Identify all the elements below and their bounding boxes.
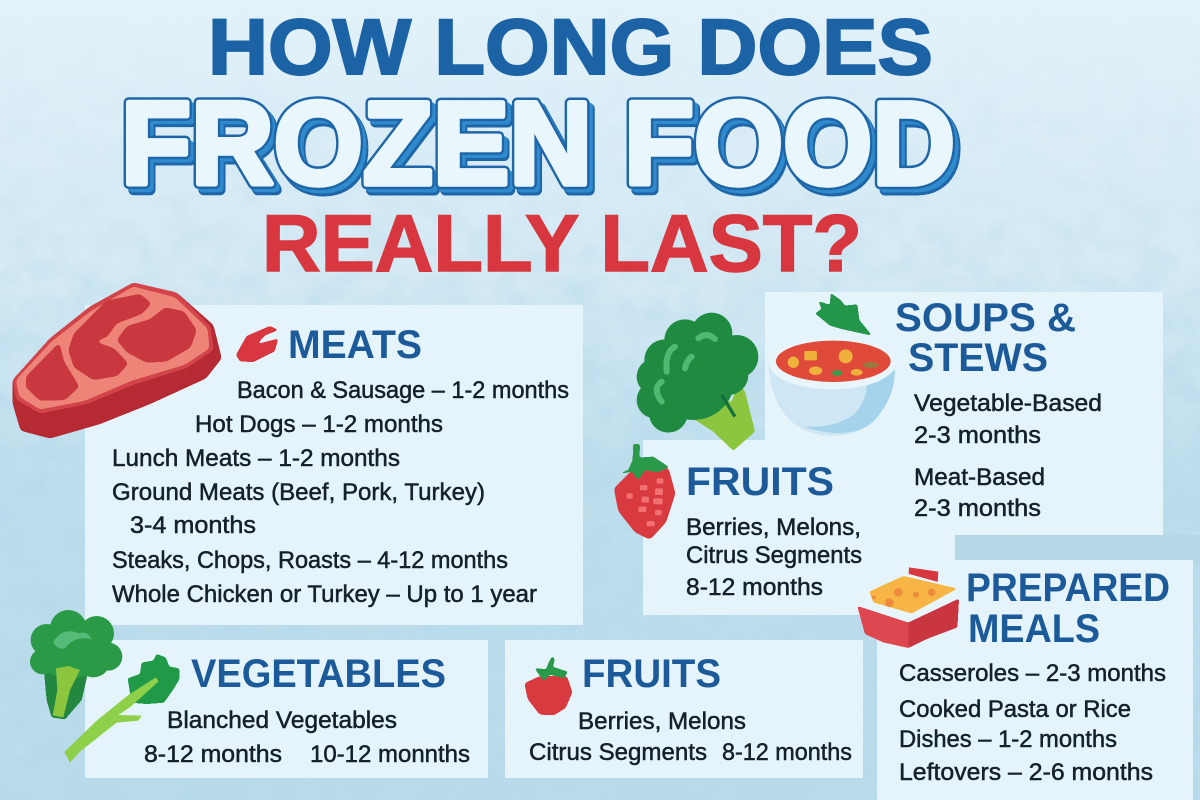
- prepared meals list: Leftovers – 2-6 months: [899, 759, 1153, 786]
- icon: strawberry upper: [613, 444, 675, 540]
- icon: small meat cut: [236, 326, 278, 362]
- panel: band behind prepared meals: [953, 535, 1200, 565]
- panel: soups and stews: [765, 292, 1163, 535]
- fruits lower list: Citrus Segments: [529, 739, 707, 766]
- prepared meals list: [899, 660, 1166, 786]
- fruits upper list: [686, 514, 862, 601]
- panel: vegetables: [85, 640, 488, 778]
- title line: frozen food: FROZEN FOOD: [126, 84, 960, 216]
- heading: soups and stews: SOUPS &: [895, 296, 1076, 340]
- icon: casserole dish: [857, 567, 959, 648]
- panel: meats: [85, 305, 583, 625]
- heading: prepared meals: PREPARED: [966, 566, 1170, 610]
- fruits lower list: 8-12 months: [722, 739, 852, 766]
- soups list: [914, 390, 1102, 522]
- icon: broccoli large: [637, 313, 758, 451]
- soups list: Meat-Based: [914, 464, 1045, 491]
- icon: soup bowl: [768, 337, 896, 436]
- title line: how long does: HOW LONG DOES: [208, 2, 933, 91]
- prepared meals list: Dishes – 1-2 months: [899, 726, 1117, 753]
- meats list: [112, 377, 569, 608]
- heading: vegetables: VEGETABLES: [191, 652, 446, 696]
- vegetables list: [144, 707, 470, 768]
- panel: fruits lower: [505, 640, 863, 778]
- soups list: 2-3 months: [914, 495, 1041, 522]
- heading: soups and stews: STEWS: [908, 336, 1048, 380]
- icon: broccoli small: [30, 610, 122, 719]
- icon: parsley garnish: [815, 293, 872, 336]
- heading: soups and stews: [895, 296, 1076, 380]
- heading: prepared meals: MEALS: [968, 607, 1100, 651]
- meats list: Steaks, Chops, Roasts – 4-12 months: [112, 547, 508, 574]
- meats list: Lunch Meats – 1-2 months: [112, 445, 400, 472]
- title line: frozen food: FROZEN FOOD: [121, 78, 955, 210]
- panel: prepared meals: [877, 560, 1193, 800]
- soups list: 2-3 months: [914, 422, 1041, 449]
- title line: frozen food: FROZEN FOOD: [121, 78, 955, 210]
- prepared meals list: Cooked Pasta or Rice: [899, 696, 1131, 723]
- vegetables list: 8-12 months: [144, 741, 282, 768]
- panel: fruits upper: [643, 440, 955, 615]
- icon: strawberry lower: [525, 657, 572, 715]
- meats list: Ground Meats (Beef, Pork, Turkey): [112, 479, 485, 506]
- meats list: Whole Chicken or Turkey – Up to 1 year: [112, 581, 537, 608]
- fruits upper list: Berries, Melons,: [686, 514, 861, 541]
- vegetables list: Blanched Vegetables: [167, 707, 397, 734]
- icon: celery: [64, 654, 179, 763]
- fruits upper list: Citrus Segments: [686, 542, 862, 569]
- title line: really last: REALLY LAST?: [262, 199, 862, 289]
- fruits upper list: 8-12 months: [686, 574, 823, 601]
- heading: fruits upper: FRUITS: [686, 460, 834, 504]
- fruits lower list: Berries, Melons: [578, 708, 746, 735]
- title line: frozen food: FROZEN FOOD: [125, 82, 959, 214]
- meats list: Hot Dogs – 1-2 months: [195, 411, 443, 438]
- soups list: Vegetable-Based: [914, 390, 1102, 417]
- heading: prepared meals: [966, 566, 1170, 651]
- vegetables list: 10-12 monnths: [310, 741, 470, 768]
- prepared meals list: Casseroles – 2-3 months: [899, 660, 1166, 687]
- meats list: Bacon & Sausage – 1-2 months: [237, 377, 569, 404]
- heading: fruits lower: FRUITS: [582, 652, 721, 696]
- heading: meats: MEATS: [288, 323, 422, 367]
- title: [121, 2, 960, 289]
- meats list: 3-4 months: [130, 512, 256, 539]
- icon: steak: [13, 283, 222, 438]
- fruits lower list: [529, 708, 852, 766]
